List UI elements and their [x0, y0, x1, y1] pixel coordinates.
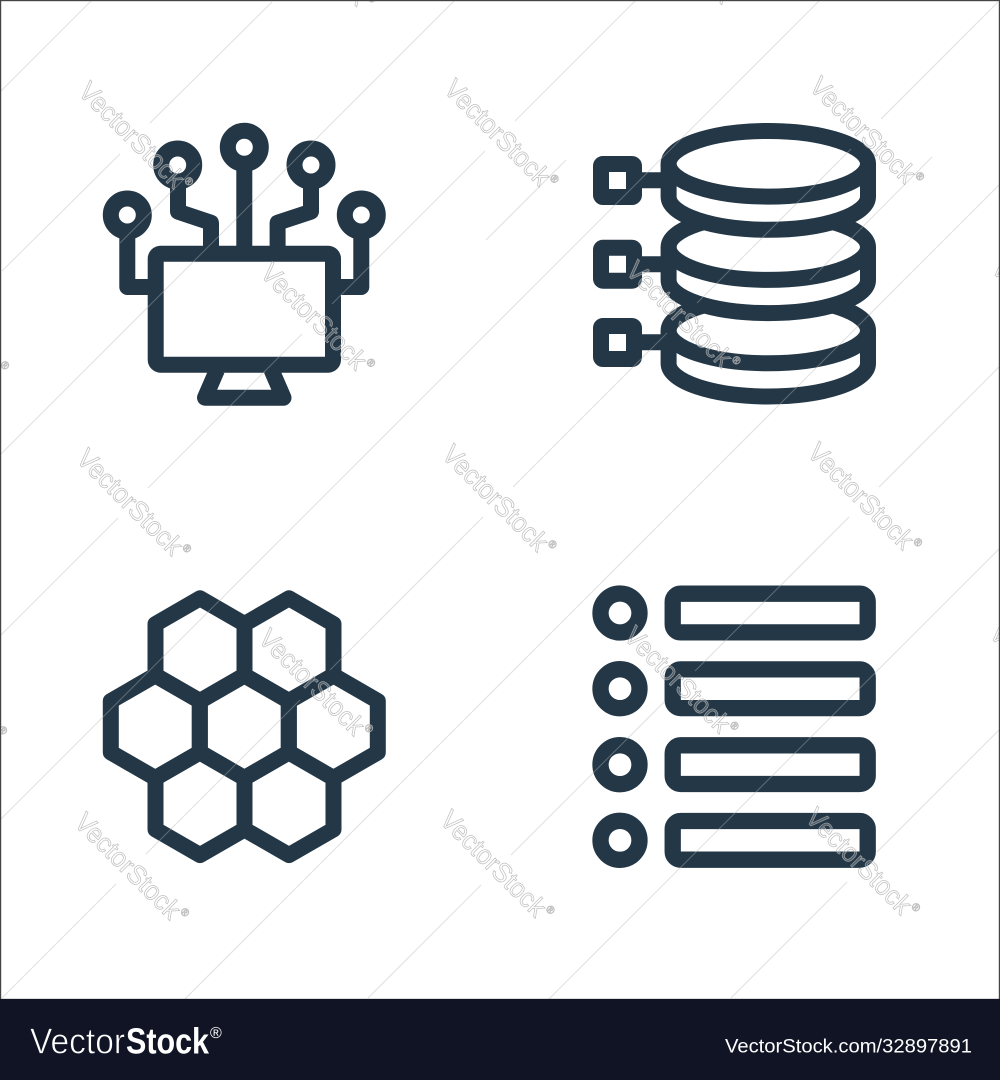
- footer bar: ®: [210, 1025, 222, 1042]
- watermark text repeated across the image: ®: [729, 354, 743, 368]
- footer image id: VectorStock.com/32897891: [725, 1036, 972, 1058]
- watermark text repeated across the image: VectorStock: [800, 802, 918, 920]
- watermark text repeated across the image: ®: [908, 901, 923, 915]
- watermark text repeated across the image: ®: [912, 170, 927, 184]
- watermark text repeated across the image: ®: [177, 906, 192, 920]
- circuit nodes: [111, 131, 378, 232]
- monitor stand: [205, 370, 284, 398]
- circuit traces: [127, 160, 361, 287]
- node connectors: [634, 180, 668, 342]
- watermark text repeated across the image: VectorStock: [434, 804, 553, 923]
- watermark text repeated across the image: ®: [727, 719, 741, 733]
- watermark text repeated across the image: VectorStock: [69, 807, 187, 925]
- watermark text repeated across the image: VectorStock: [253, 623, 371, 741]
- list bullets: [600, 594, 640, 860]
- footer bar: [0, 999, 1000, 1080]
- watermark text repeated across the image: ®: [181, 175, 196, 189]
- watermark text repeated across the image: ®: [543, 903, 557, 917]
- list bars: [673, 594, 868, 860]
- icon: bullet list with four rows: [600, 594, 868, 860]
- icon: database stack with nodes: [601, 131, 868, 396]
- node squares: [601, 164, 634, 359]
- footer logo: Vector: [30, 1020, 125, 1062]
- watermark text repeated across the image: VectorStock: [436, 439, 555, 557]
- watermark text repeated across the image: VectorStock: [73, 76, 191, 194]
- watermark text repeated across the image: VectorStock: [618, 620, 737, 739]
- icon: computer monitor with circuit nodes: [111, 131, 378, 398]
- top disk: [669, 131, 868, 230]
- watermark text repeated across the image: ®: [910, 536, 925, 550]
- watermark text repeated across the image: VectorStock: [804, 71, 922, 189]
- watermark text repeated across the image: VectorStock: [620, 255, 739, 373]
- watermark text repeated across the image: ®: [363, 356, 378, 370]
- watermark text repeated across the image: VectorStock: [802, 437, 920, 555]
- watermark text repeated across the image: VectorStock: [71, 443, 189, 561]
- middle disk: [669, 214, 868, 313]
- watermark text repeated across the image: ®: [179, 542, 194, 556]
- watermark text repeated across the image: ®: [545, 538, 559, 552]
- footer bar: Stock: [126, 1020, 210, 1062]
- watermark text repeated across the image: VectorStock: [438, 73, 557, 192]
- watermark text repeated across the image: VectorStock: [255, 257, 373, 376]
- monitor screen: [156, 254, 333, 365]
- bottom disk: [669, 298, 868, 396]
- watermark text repeated across the image: ®: [547, 172, 561, 186]
- watermark text repeated across the image: ®: [361, 722, 376, 736]
- icon: honeycomb of seven hexagons: [111, 598, 378, 855]
